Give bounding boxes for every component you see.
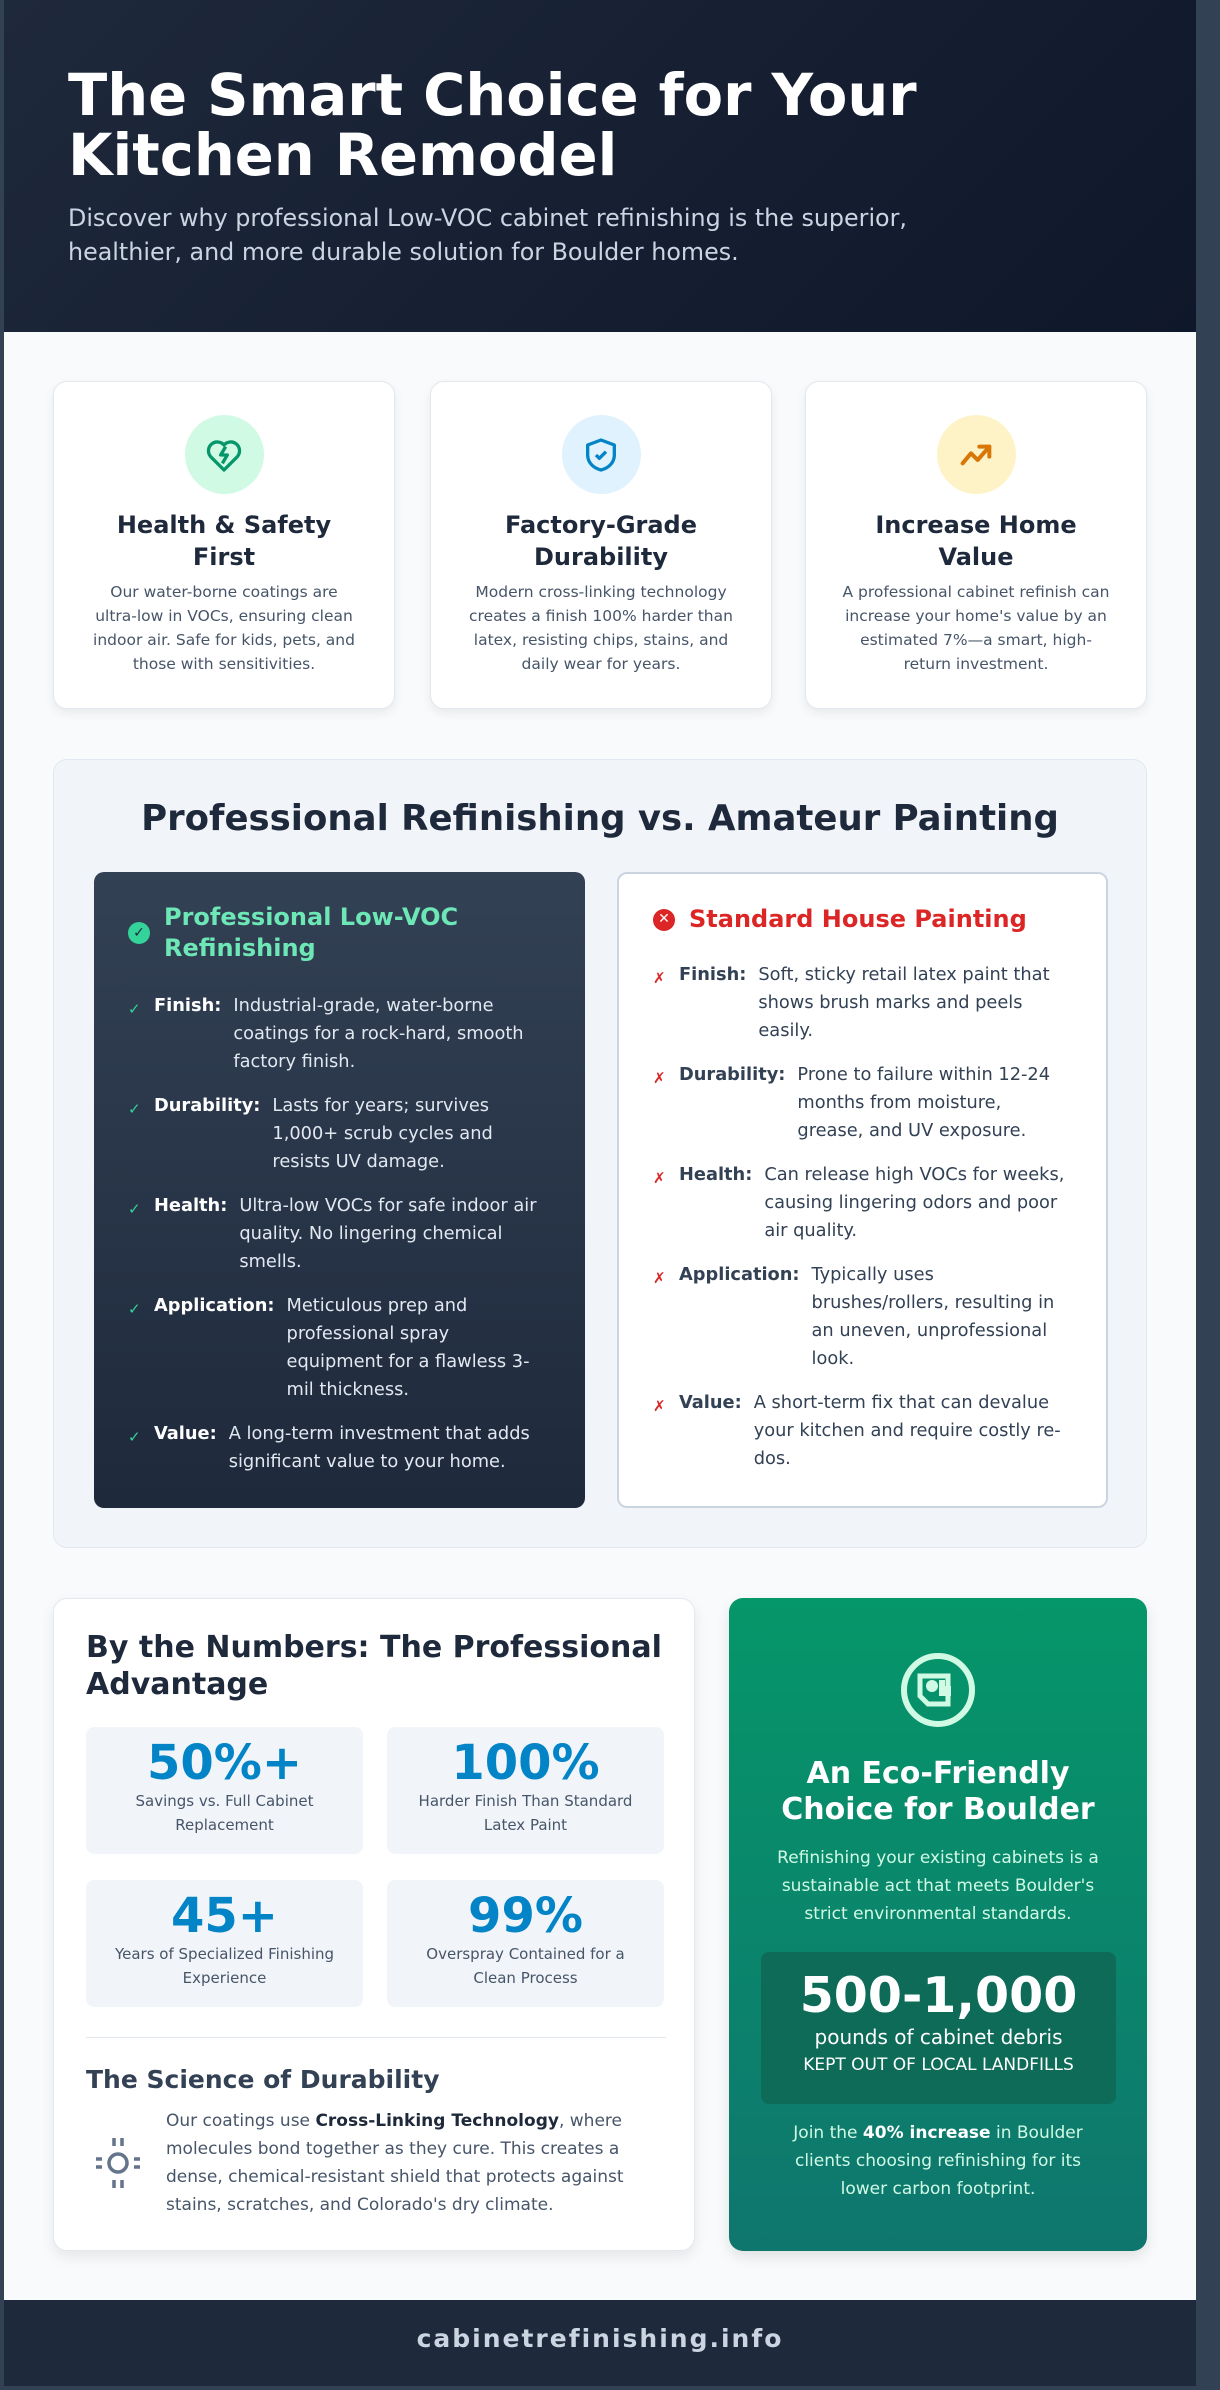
list: standard: Can release high VOCs for weeks, causing lingering odors and poor air quality.: [764, 1164, 1064, 1241]
title: The Smart Choice for Your: [68, 62, 917, 129]
text: A professional cabinet refinish can increase your home's value by an estimated 7%—a smart, high-return investment.: [842, 583, 1110, 673]
stat: 100%: 100%: [451, 1735, 600, 1791]
stat: 99%: 99%: [468, 1888, 583, 1944]
card: health: [53, 381, 395, 709]
list: professional: Lasts for years; survives 1,000+ scrub cycles and resists UV damage.: [272, 1095, 493, 1172]
stat: 99%: Overspray Contained for a Clean Process: [426, 1945, 625, 1987]
footer: [4, 2300, 1196, 2386]
list: standard: Finish:: [679, 964, 746, 985]
title: Kitchen Remodel: [68, 122, 617, 189]
text: Modern cross-linking technology creates a finish 100% harder than latex, resisting chips, stains, and daily wear for years.: [469, 583, 733, 673]
heading: professional: ✓: [133, 924, 145, 940]
icon: recycle: [901, 1653, 975, 1727]
stat: 99%: [387, 1880, 664, 2007]
heading: Increase Home Value: [875, 511, 1077, 571]
list: professional: A long-term investment that adds significant value to your home.: [229, 1423, 530, 1472]
panel: professional: [94, 872, 585, 1508]
science heading: The Science of Durability: [86, 2065, 440, 2094]
title: [68, 62, 917, 189]
stat: 100%: [387, 1727, 664, 1854]
panel: comparison: [53, 759, 1147, 1548]
stat: 50%: Savings vs. Full Cabinet Replacement: [136, 1792, 314, 1834]
eco heading: [781, 1756, 1095, 1827]
callout: debris: KEPT OUT OF LOCAL LANDFILLS: [803, 2055, 1074, 2075]
header: [4, 0, 1196, 332]
eco heading: Choice for Boulder: [781, 1792, 1095, 1827]
list: standard: A short-term fix that can devalue your kitchen and require costly re-dos.: [754, 1392, 1061, 1469]
footer: cabinetrefinishing.info: [417, 2324, 783, 2353]
stat: 50%: 50%+: [147, 1735, 302, 1791]
eco heading: An Eco-Friendly: [806, 1756, 1070, 1791]
list: standard: Health:: [679, 1164, 752, 1185]
heading: professional: Professional Low-VOC Refinishing: [164, 903, 458, 962]
numbers heading: By the Numbers: The Professional Advantage: [86, 1630, 662, 1702]
list: professional: Ultra-low VOCs for safe indoor air quality. No lingering chemical smells.: [239, 1195, 537, 1272]
list: standard: Prone to failure within 12-24 months from moisture, grease, and UV exposure.: [797, 1064, 1050, 1141]
list: professional: Finish:: [154, 995, 221, 1016]
list: standard: Value:: [679, 1392, 742, 1413]
list: professional: Meticulous prep and professional spray equipment for a flawless 3-mil thickness.: [287, 1295, 530, 1400]
icon: sun/molecule: [96, 2138, 140, 2188]
list: standard: Durability:: [679, 1064, 785, 1085]
list: professional: ✓: [128, 1300, 141, 1318]
stat: 45+: Years of Specialized Finishing Experience: [115, 1945, 334, 1987]
list: standard: [653, 964, 1064, 1469]
icon: trend: [936, 415, 1016, 494]
list: standard: ✗: [653, 969, 666, 987]
stat: 50%: [86, 1727, 363, 1854]
science text: Our coatings use Cross-Linking Technology, where molecules bond together as they cure. This creates a dense, chemical-resistant shield that protects against stains, scratches, and Colorado's dry climate.: [166, 2111, 624, 2215]
list: standard: ✗: [653, 1269, 666, 1287]
list: standard: ✗: [653, 1169, 666, 1187]
card: value: [805, 381, 1147, 709]
list: standard: Application:: [679, 1264, 800, 1285]
text: Our water-borne coatings are ultra-low in VOCs, ensuring clean indoor air. Safe for kids, pets, and those with sensitivities.: [93, 583, 355, 673]
card: durability: [430, 381, 772, 709]
list: standard: Soft, sticky retail latex paint that shows brush marks and peels easily.: [758, 964, 1050, 1041]
list: standard: ✗: [653, 1069, 666, 1087]
list: professional: ✓: [128, 1428, 141, 1446]
list: professional: Health:: [154, 1195, 227, 1216]
list: professional: Application:: [154, 1295, 275, 1316]
callout: debris: pounds of cabinet debris: [815, 2025, 1062, 2049]
eco footer text: Join the 40% increase in Boulder clients choosing refinishing for its lower carbon footprint.: [793, 2123, 1083, 2199]
icon: shield: [562, 415, 640, 494]
heading: Health & Safety First: [117, 511, 331, 571]
list: professional: Durability:: [154, 1095, 260, 1116]
stat: 100%: Harder Finish Than Standard Latex Paint: [419, 1792, 632, 1834]
eco text: Refinishing your existing cabinets is a sustainable act that meets Boulder's strict environmental standards.: [777, 1848, 1099, 1924]
list: professional: Industrial-grade, water-borne coatings for a rock-hard, smooth factory finish.: [233, 995, 524, 1072]
heading: Factory-Grade Durability: [505, 511, 697, 571]
panel: standard: [617, 872, 1108, 1508]
list: professional: ✓: [128, 1200, 141, 1218]
list: professional: Value:: [154, 1423, 217, 1444]
list: professional: [128, 995, 537, 1472]
icon: heart: [184, 415, 264, 494]
callout: debris: 500-1,000: [800, 1967, 1077, 2024]
panel: eco: [729, 1598, 1147, 2251]
comparison title: Professional Refinishing vs. Amateur Painting: [141, 798, 1059, 839]
list: standard: Typically uses brushes/rollers, resulting in an uneven, unprofessional look.: [812, 1264, 1054, 1369]
list: standard: ✗: [653, 1397, 666, 1415]
callout: debris: [761, 1952, 1116, 2104]
heading: standard: ✕: [658, 911, 670, 927]
heading: standard: Standard House Painting: [689, 905, 1027, 933]
subtitle: Discover why professional Low-VOC cabinet refinishing is the superior, healthier, and more durable solution for Boulder homes.: [68, 204, 907, 266]
panel: by the numbers: [53, 1598, 695, 2251]
list: professional: ✓: [128, 1000, 141, 1018]
stat: 45+: 45+: [171, 1888, 278, 1944]
list: professional: ✓: [128, 1100, 141, 1118]
stat: 45+: [86, 1880, 363, 2007]
